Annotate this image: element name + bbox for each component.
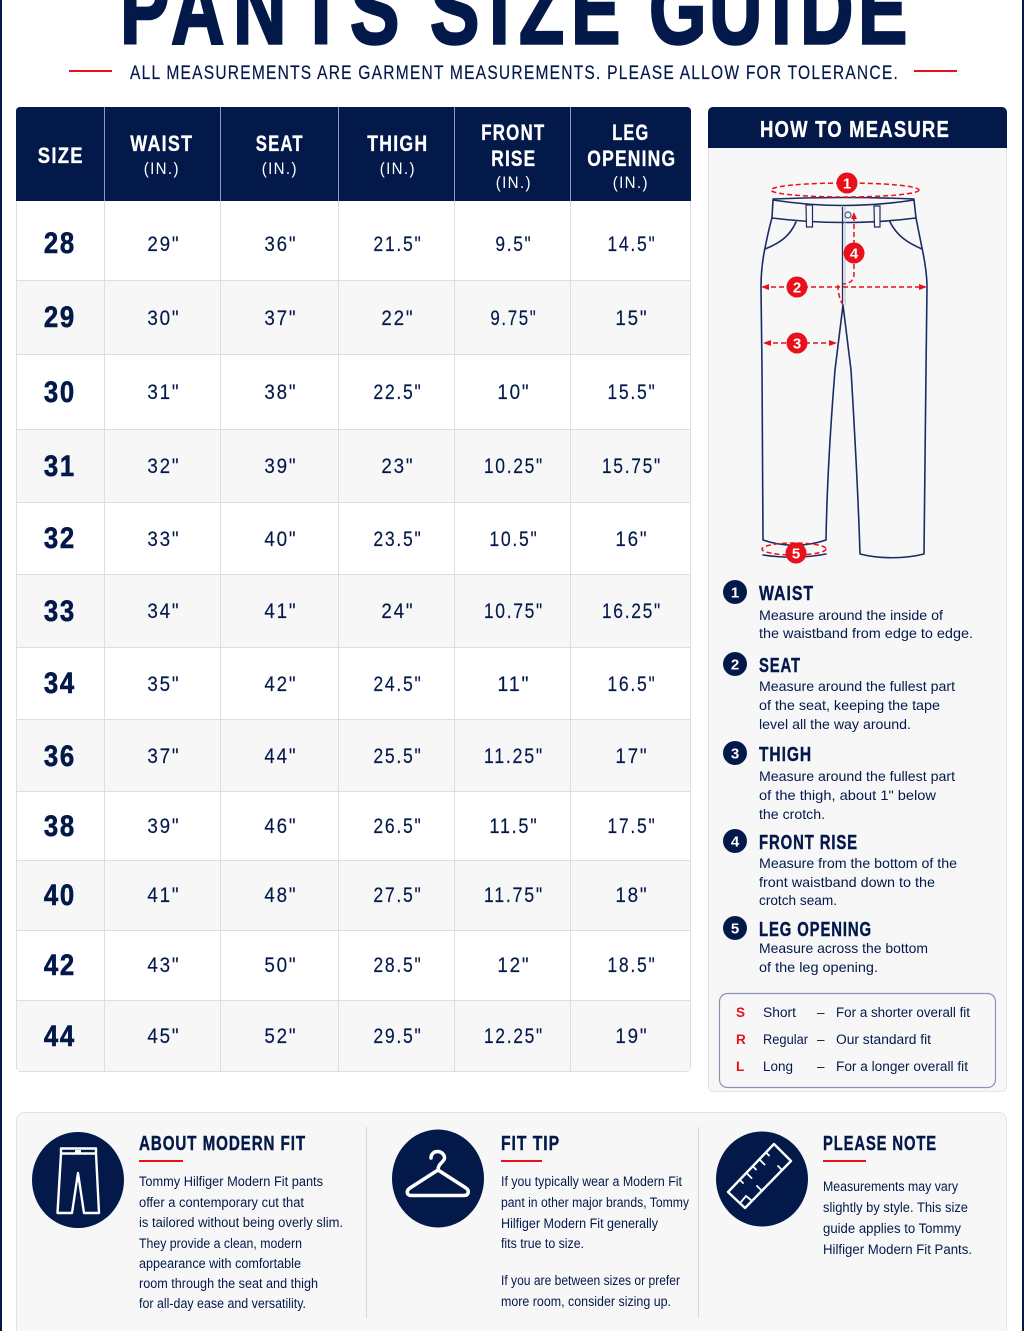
row size 42 bbox=[44, 949, 656, 982]
row size 44 bbox=[44, 1020, 648, 1053]
table header: (IN.) bbox=[613, 173, 649, 192]
row size 42: 43" bbox=[147, 954, 180, 977]
about modern fit: offer a contemporary cut that bbox=[139, 1195, 304, 1210]
row size 44: 12.25" bbox=[484, 1025, 544, 1048]
row size 40: 11.75" bbox=[484, 884, 544, 907]
row size 31: 15.75" bbox=[602, 455, 662, 478]
table header: WAIST bbox=[130, 131, 193, 156]
row size 30: 15.5" bbox=[607, 381, 656, 404]
row size 30: 31" bbox=[147, 381, 180, 404]
row size 32 bbox=[44, 522, 648, 555]
step 4: front rise: 4 bbox=[731, 834, 740, 850]
row size 28: 36" bbox=[264, 233, 297, 256]
step 3: thigh: the crotch. bbox=[759, 806, 825, 822]
table header: LEG bbox=[612, 120, 649, 145]
fit tip: FIT TIP bbox=[501, 1133, 560, 1155]
measure marker 1: waist: 1 bbox=[843, 176, 851, 192]
about modern fit bbox=[32, 1132, 343, 1311]
row size 29: 30" bbox=[147, 307, 180, 330]
about modern fit: is tailored without being overly slim. bbox=[139, 1215, 343, 1230]
measure marker 4: front rise bbox=[838, 212, 864, 305]
row size 36: 11.25" bbox=[484, 745, 544, 768]
step 1: waist: 1 bbox=[731, 584, 739, 602]
row size 40: 48" bbox=[264, 884, 297, 907]
please note: Hilfiger Modern Fit Pants. bbox=[823, 1242, 972, 1257]
row size 33: 24" bbox=[381, 600, 414, 623]
row size 33: 10.75" bbox=[484, 600, 544, 623]
row size 42: 18.5" bbox=[607, 954, 656, 977]
length legend: Our standard fit bbox=[836, 1032, 931, 1047]
row size 29: 9.75" bbox=[490, 307, 537, 330]
measure marker 4: front rise: 4 bbox=[850, 246, 859, 262]
measure marker 3: thigh bbox=[763, 332, 837, 354]
row size 28: 9.5" bbox=[495, 233, 532, 256]
step 2: seat: Measure around the fullest part bbox=[759, 678, 955, 694]
row size 30: 22.5" bbox=[373, 381, 422, 404]
step 2: seat: level all the way around. bbox=[759, 716, 911, 732]
row size 44: 19" bbox=[615, 1025, 648, 1048]
length legend: – bbox=[817, 1059, 825, 1074]
table header: SIZE bbox=[38, 143, 84, 168]
table header: (IN.) bbox=[144, 159, 180, 178]
row size 44: 29.5" bbox=[373, 1025, 422, 1048]
row size 31: 23" bbox=[381, 455, 414, 478]
fit tip: fits true to size. bbox=[501, 1236, 584, 1251]
panel heading: HOW TO MEASURE bbox=[760, 116, 950, 142]
row size 33: 16.25" bbox=[602, 600, 662, 623]
fit tip: pant in other major brands, Tommy bbox=[501, 1195, 689, 1210]
step 1: waist bbox=[723, 580, 973, 641]
row size 40: 27.5" bbox=[373, 884, 422, 907]
about modern fit: appearance with comfortable bbox=[139, 1256, 301, 1271]
row size 30 bbox=[44, 376, 656, 409]
length legend: L bbox=[736, 1059, 744, 1074]
please note: guide applies to Tommy bbox=[823, 1221, 961, 1236]
fit tip bbox=[392, 1130, 689, 1309]
step 1: waist: Measure around the inside of bbox=[759, 607, 943, 623]
row size 29: 37" bbox=[264, 307, 297, 330]
step 2: seat: SEAT bbox=[759, 655, 801, 677]
row size 38: 46" bbox=[264, 815, 297, 838]
please note bbox=[716, 1132, 972, 1257]
row size 40 bbox=[44, 879, 648, 912]
length legend: Regular bbox=[763, 1032, 808, 1047]
row size 30: 38" bbox=[264, 381, 297, 404]
row size 32: 32 bbox=[44, 522, 76, 555]
about modern fit: ABOUT MODERN FIT bbox=[139, 1133, 306, 1155]
length legend bbox=[720, 994, 996, 1088]
table header: OPENING bbox=[587, 146, 676, 171]
size table bbox=[16, 107, 691, 1072]
row size 28: 14.5" bbox=[607, 233, 656, 256]
row size 34 bbox=[44, 667, 656, 700]
measure marker 2: seat: 2 bbox=[793, 280, 801, 296]
row size 28: 28 bbox=[44, 227, 76, 260]
row size 40: 41" bbox=[147, 884, 180, 907]
row size 32: 40" bbox=[264, 528, 297, 551]
table header: RISE bbox=[491, 146, 536, 171]
row size 32: 23.5" bbox=[373, 528, 422, 551]
row size 34: 34 bbox=[44, 667, 76, 700]
fit tip: more room, consider sizing up. bbox=[501, 1294, 671, 1309]
step 5: leg opening: LEG OPENING bbox=[759, 919, 872, 941]
length legend: Short bbox=[763, 1005, 796, 1020]
step 4: front rise: Measure from the bottom of the bbox=[759, 855, 957, 871]
panel heading bbox=[708, 107, 1007, 148]
row size 40: 18" bbox=[615, 884, 648, 907]
row size 28: 29" bbox=[147, 233, 180, 256]
row size 38: 26.5" bbox=[373, 815, 422, 838]
row size 36: 37" bbox=[147, 745, 180, 768]
fit tip: Hilfiger Modern Fit generally bbox=[501, 1216, 658, 1231]
table header bbox=[16, 107, 691, 201]
row size 29: 22" bbox=[381, 307, 414, 330]
row size 38: 38 bbox=[44, 810, 76, 843]
row size 31: 31 bbox=[44, 450, 76, 483]
row size 33: 41" bbox=[264, 600, 297, 623]
step 5: leg opening: 5 bbox=[731, 920, 739, 938]
step 3: thigh: of the thigh, about 1" below bbox=[759, 787, 937, 803]
please note: slightly by style. This size bbox=[823, 1200, 968, 1215]
table header: FRONT bbox=[481, 120, 545, 145]
please note: Measurements may vary bbox=[823, 1179, 958, 1194]
row size 38 bbox=[44, 810, 656, 843]
row size 31: 10.25" bbox=[484, 455, 544, 478]
row size 31: 39" bbox=[264, 455, 297, 478]
row size 28: 21.5" bbox=[373, 233, 422, 256]
step 4: front rise: FRONT RISE bbox=[759, 832, 858, 854]
row size 29 bbox=[44, 301, 648, 334]
row size 33: 34" bbox=[147, 600, 180, 623]
step 3: thigh bbox=[723, 741, 955, 822]
fit tip: If you typically wear a Modern Fit bbox=[501, 1174, 682, 1189]
row size 34: 42" bbox=[264, 673, 297, 696]
about modern fit: They provide a clean, modern bbox=[139, 1236, 302, 1251]
row size 36: 17" bbox=[615, 745, 648, 768]
step 5: leg opening: Measure across the bottom bbox=[759, 940, 928, 956]
icon: pants bbox=[32, 1132, 124, 1228]
row size 36: 36 bbox=[44, 740, 76, 773]
length legend: S bbox=[736, 1005, 745, 1020]
step 4: front rise bbox=[723, 829, 957, 908]
row size 38: 11.5" bbox=[489, 815, 538, 838]
measure marker 2: seat bbox=[761, 276, 927, 298]
table header: (IN.) bbox=[496, 173, 532, 192]
length legend: For a shorter overall fit bbox=[836, 1005, 970, 1020]
length legend: R bbox=[736, 1032, 746, 1047]
row size 32: 10.5" bbox=[489, 528, 538, 551]
row size 28 bbox=[44, 227, 656, 260]
icon: hanger bbox=[392, 1130, 484, 1228]
row size 44: 52" bbox=[264, 1025, 297, 1048]
step 4: front rise: front waistband down to the bbox=[759, 874, 935, 890]
row size 36: 25.5" bbox=[373, 745, 422, 768]
length legend: For a longer overall fit bbox=[836, 1059, 968, 1074]
length legend: – bbox=[817, 1005, 825, 1020]
row size 36 bbox=[44, 740, 648, 773]
row size 30: 10" bbox=[497, 381, 530, 404]
measure marker 5: leg opening: 5 bbox=[792, 546, 800, 562]
row size 42: 42 bbox=[44, 949, 76, 982]
fit tip: If you are between sizes or prefer bbox=[501, 1273, 680, 1288]
length legend: Long bbox=[763, 1059, 793, 1074]
row size 34: 35" bbox=[147, 673, 180, 696]
icon: ruler bbox=[716, 1132, 808, 1226]
step 1: waist: WAIST bbox=[759, 583, 814, 605]
row size 32: 16" bbox=[615, 528, 648, 551]
row size 34: 24.5" bbox=[373, 673, 422, 696]
panel: how to measure bbox=[708, 107, 1007, 1092]
row size 42: 50" bbox=[264, 954, 297, 977]
row size 38: 39" bbox=[147, 815, 180, 838]
row size 40: 40 bbox=[44, 879, 76, 912]
about modern fit: room through the seat and thigh bbox=[139, 1276, 318, 1291]
step 2: seat bbox=[723, 652, 955, 732]
step 5: leg opening bbox=[723, 916, 928, 975]
row size 30: 30 bbox=[44, 376, 76, 409]
row size 29: 15" bbox=[615, 307, 648, 330]
row size 44: 45" bbox=[147, 1025, 180, 1048]
row size 44: 44 bbox=[44, 1020, 76, 1053]
row size 34: 16.5" bbox=[607, 673, 656, 696]
table header: (IN.) bbox=[262, 159, 298, 178]
row size 33 bbox=[44, 595, 662, 628]
step 4: front rise: crotch seam. bbox=[759, 892, 837, 908]
step 5: leg opening: of the leg opening. bbox=[759, 959, 878, 975]
row size 29: 29 bbox=[44, 301, 76, 334]
table header: (IN.) bbox=[380, 159, 416, 178]
about modern fit: Tommy Hilfiger Modern Fit pants bbox=[139, 1174, 323, 1189]
step 2: seat: of the seat, keeping the tape bbox=[759, 697, 940, 713]
table header: THIGH bbox=[367, 131, 428, 156]
row size 34: 11" bbox=[497, 673, 530, 696]
row size 42: 12" bbox=[497, 954, 530, 977]
about modern fit: for all-day ease and versatility. bbox=[139, 1296, 306, 1311]
step 2: seat: 2 bbox=[731, 656, 739, 674]
measure marker 3: thigh: 3 bbox=[793, 336, 801, 352]
row size 42: 28.5" bbox=[373, 954, 422, 977]
panel: bottom notes bbox=[16, 1112, 1006, 1331]
step 3: thigh: THIGH bbox=[759, 744, 812, 766]
step 1: waist: the waistband from edge to edge. bbox=[759, 625, 973, 641]
row size 32: 33" bbox=[147, 528, 180, 551]
measure marker 5: leg opening bbox=[762, 542, 826, 564]
row size 33: 33 bbox=[44, 595, 76, 628]
row size 31 bbox=[44, 450, 662, 483]
row size 36: 44" bbox=[264, 745, 297, 768]
please note: PLEASE NOTE bbox=[823, 1133, 937, 1155]
length legend: – bbox=[817, 1032, 825, 1047]
measure marker 1: waist bbox=[771, 172, 919, 197]
step 3: thigh: Measure around the fullest part bbox=[759, 768, 955, 784]
step 3: thigh: 3 bbox=[731, 746, 739, 762]
row size 38: 17.5" bbox=[607, 815, 656, 838]
row size 31: 32" bbox=[147, 455, 180, 478]
table header: SEAT bbox=[256, 131, 304, 156]
pants diagram bbox=[761, 198, 927, 558]
